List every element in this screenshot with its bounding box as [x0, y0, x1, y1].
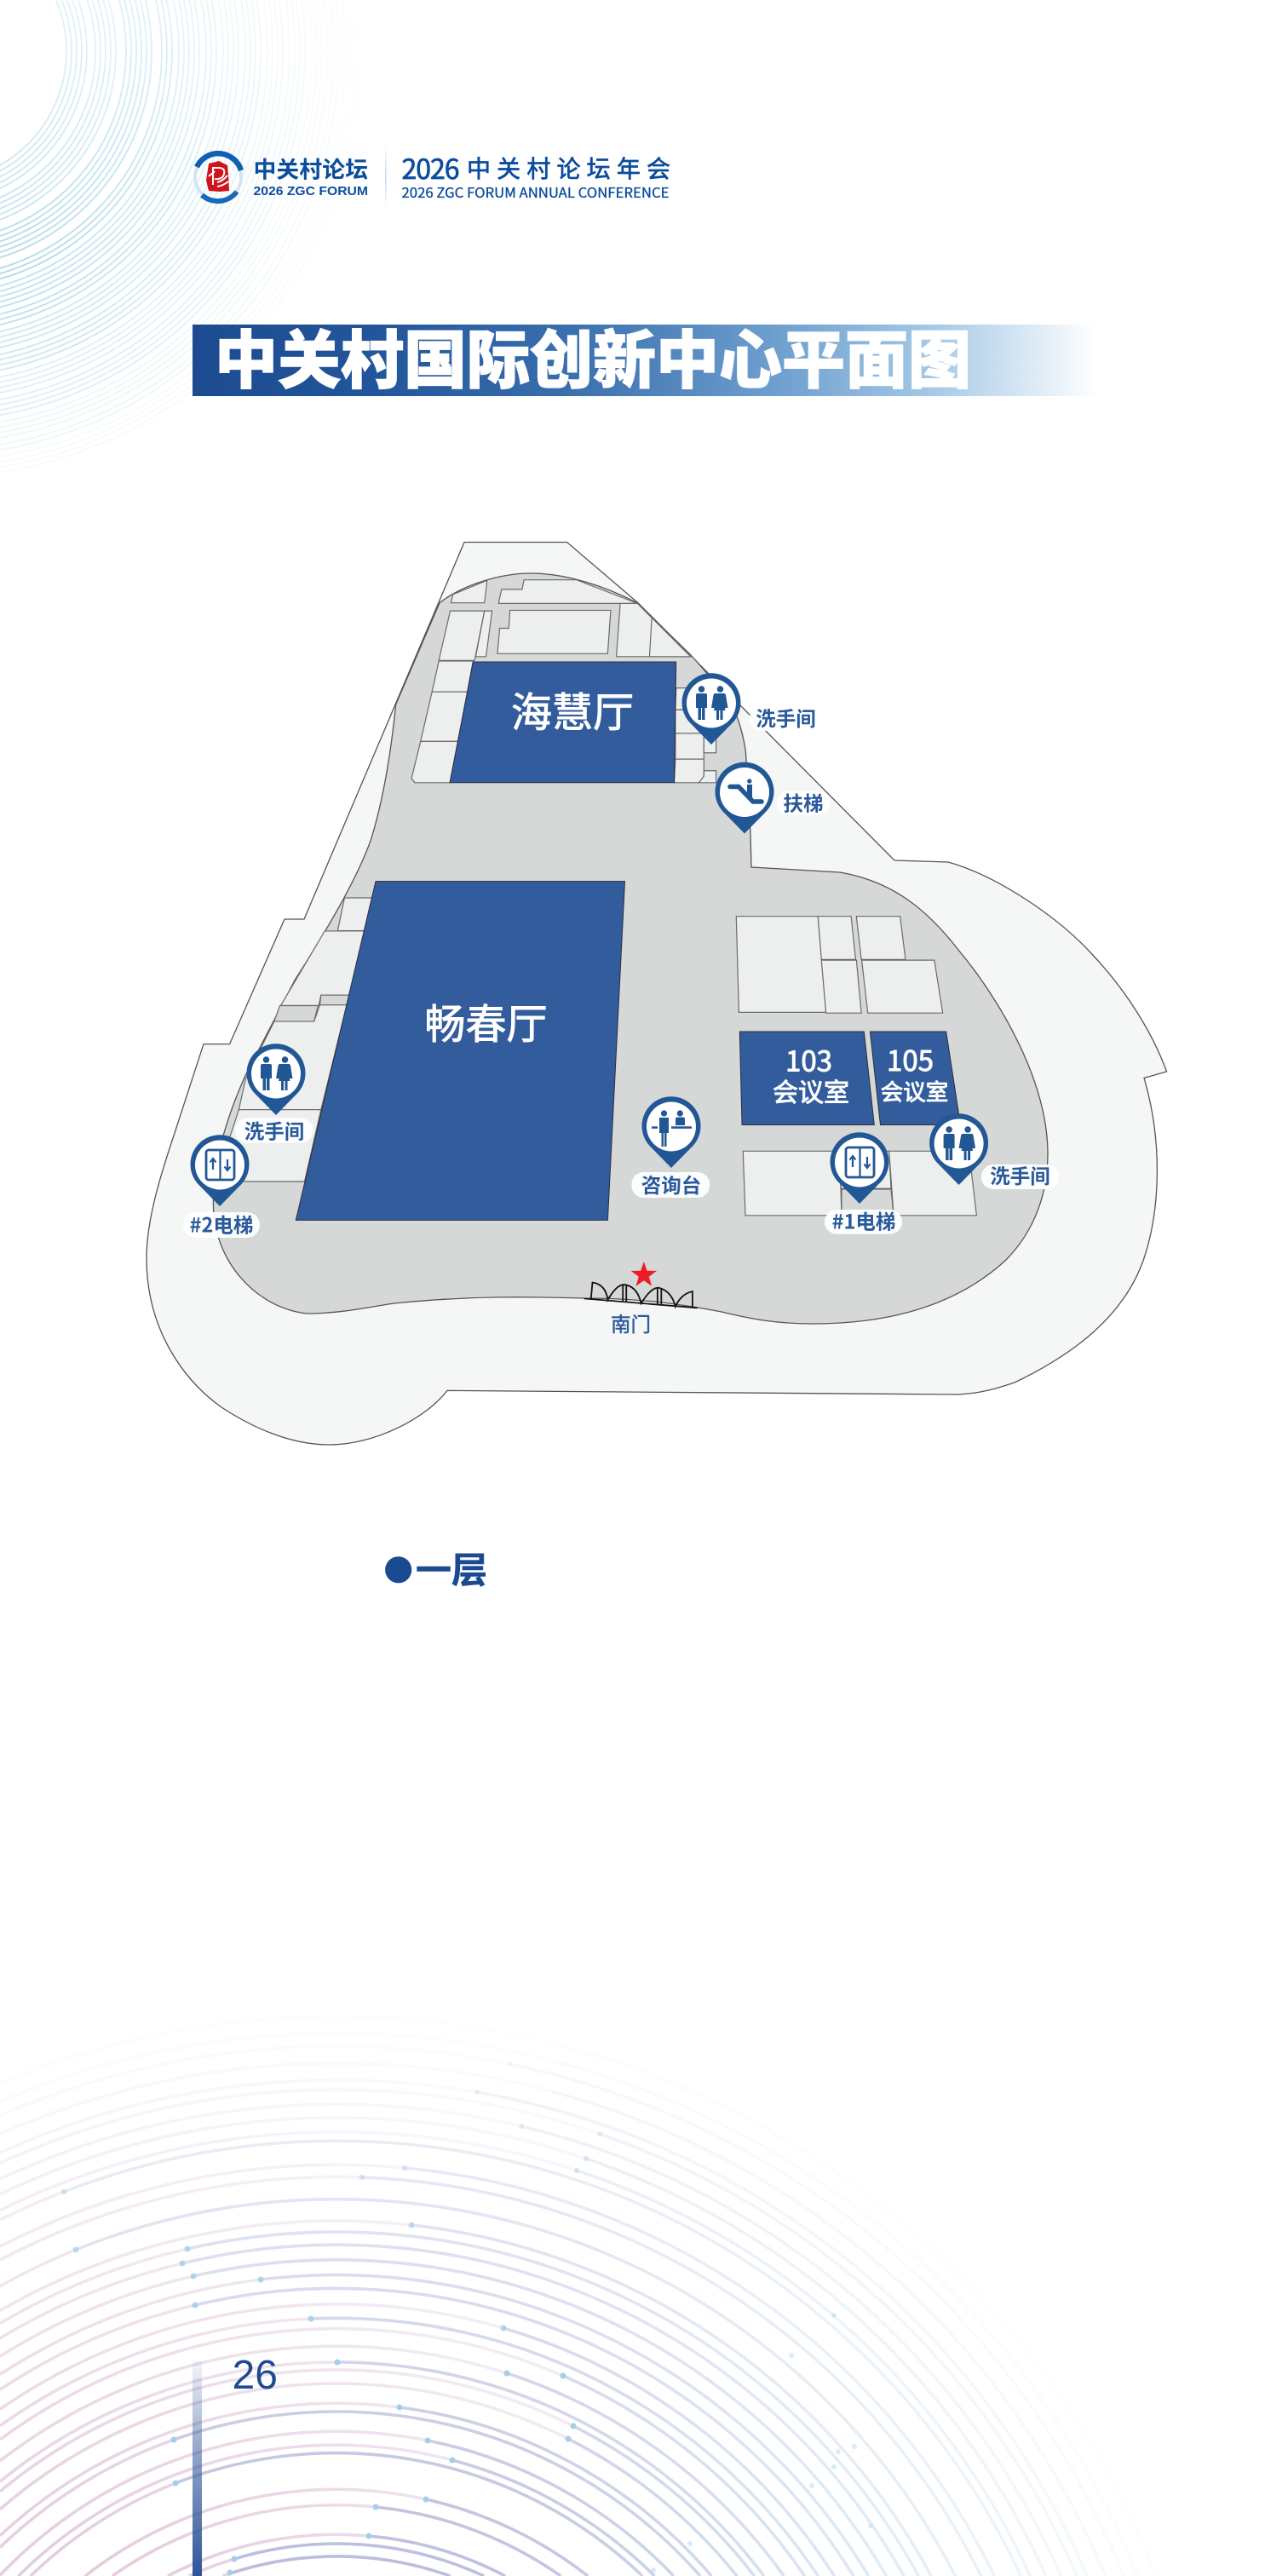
conference year: 2026 [402, 148, 460, 187]
rooms north block [411, 580, 691, 783]
title banner [193, 310, 1096, 401]
logo wordmark chinese: 中关村论坛 [254, 152, 368, 184]
south door [584, 1283, 698, 1308]
outer site area [147, 542, 1167, 1445]
floor plan map [147, 542, 1167, 1445]
conference name chinese characters: 中关村论坛年会 [467, 151, 670, 185]
page number: 26 [232, 2353, 278, 2398]
inner floor area [213, 573, 1048, 1324]
room 103 [739, 1032, 874, 1124]
label washroom north: 洗手间 [756, 703, 816, 732]
label washroom west: 洗手间 [244, 1116, 304, 1145]
label meeting room: 会议室 [881, 1073, 948, 1107]
label information desk: 咨询台 [641, 1170, 701, 1199]
rooms east block [736, 917, 976, 1216]
label elevator 2: #2电梯 [190, 1210, 253, 1239]
label: Haihui hall: 海慧厅 [511, 679, 634, 739]
decorative background arcs top-left [0, 0, 361, 477]
logo: Zhongguancun Forum [195, 152, 368, 201]
label meeting room: 会议室 [773, 1072, 849, 1109]
conference name [402, 148, 670, 202]
label 105: 105 [887, 1038, 934, 1079]
floor caption [385, 1542, 487, 1594]
pin: washroom west [247, 1044, 305, 1115]
rooms north block east side [675, 688, 716, 783]
title: 中关村国际创新中心平面图 [215, 310, 971, 401]
label 103: 103 [785, 1039, 832, 1080]
page number bar [193, 2360, 202, 2576]
label elevator 1: #1电梯 [832, 1206, 895, 1235]
decorative background arcs bottom [0, 2016, 1156, 2576]
logo wordmark english: 2026 ZGC FORUM [254, 184, 368, 198]
caption bullet [385, 1556, 411, 1583]
pin: information desk [642, 1096, 700, 1168]
icon: red star entrance [631, 1262, 657, 1286]
conference name english: 2026 ZGC FORUM ANNUAL CONFERENCE [402, 181, 670, 202]
label washroom east: 洗手间 [990, 1160, 1050, 1189]
rooms south-west block [230, 898, 372, 1182]
label south gate: 南门 [611, 1308, 651, 1337]
divider [385, 144, 387, 210]
room 105 [870, 1032, 961, 1124]
pin: escalator [716, 762, 773, 833]
label escalator: 扶梯 [784, 787, 823, 816]
label: Changchun hall: 畅春厅 [424, 991, 548, 1050]
hall: Haihui [450, 662, 676, 783]
pin: washroom north [681, 673, 741, 745]
caption text: 一层 [416, 1542, 487, 1594]
icon: forum emblem [195, 153, 241, 201]
pin: elevator 1 [830, 1132, 889, 1204]
pin: elevator 2 [191, 1135, 249, 1206]
pin: washroom east [929, 1113, 988, 1185]
hall: Changchun [296, 882, 625, 1220]
